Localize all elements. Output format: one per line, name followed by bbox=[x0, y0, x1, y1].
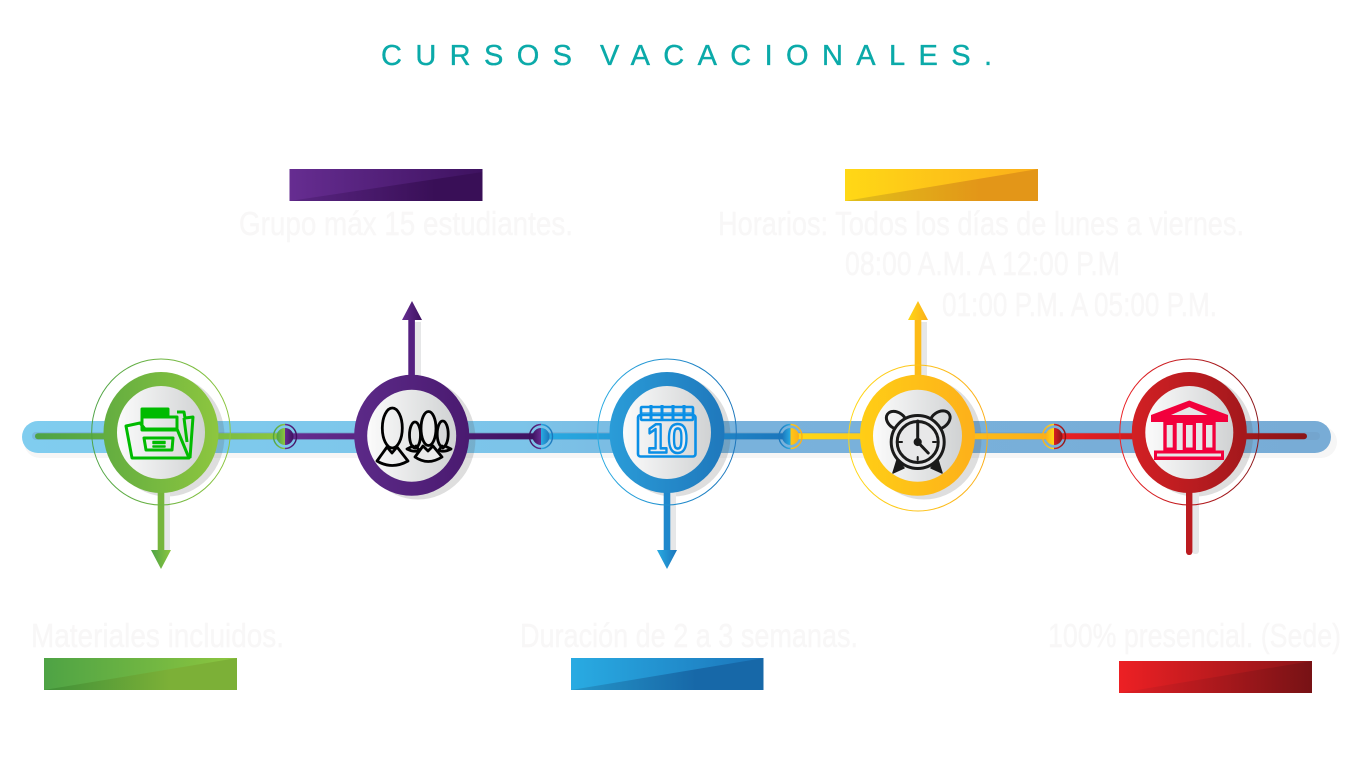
timeline track bbox=[22, 421, 1337, 458]
icon: calendar: 10 bbox=[647, 416, 688, 462]
marker: purple bbox=[354, 375, 469, 496]
banner: purple bbox=[290, 169, 482, 201]
text: schedule: 01:00 P.M. A 05:00 P.M. bbox=[942, 286, 1217, 323]
node: yellow to red bbox=[1042, 424, 1066, 448]
node: green to purple bbox=[274, 424, 296, 448]
icon: alarm clock bbox=[883, 407, 954, 473]
icon: calendar bbox=[638, 405, 696, 462]
icon: folder bbox=[126, 409, 193, 458]
node: blue to yellow bbox=[779, 424, 802, 448]
banner: blue bbox=[571, 658, 764, 690]
text: schedule: 08:00 A.M. A 12:00 P.M bbox=[845, 245, 1120, 282]
marker: yellow bbox=[849, 365, 987, 511]
arrow: blue down bbox=[657, 488, 677, 569]
text: duration: Duración de 2 a 3 semanas. bbox=[520, 617, 858, 654]
title: VACACIONALES. bbox=[600, 40, 992, 72]
text: schedule: Horarios: Todos los días de lunes a viernes. bbox=[718, 205, 1244, 242]
marker: red bbox=[1120, 359, 1259, 505]
timeline line segments bbox=[35, 433, 1307, 439]
marker drop shadows bbox=[110, 376, 1253, 500]
text: materials: Materiales incluidos. bbox=[31, 617, 284, 654]
text: group size: Grupo máx 15 estudiantes. bbox=[239, 205, 573, 242]
arrow: purple up bbox=[402, 301, 422, 379]
icon: people bbox=[377, 408, 451, 466]
icon: institution building bbox=[1151, 400, 1228, 460]
banner: yellow bbox=[845, 169, 1038, 201]
title bbox=[381, 40, 992, 72]
arrow: green down bbox=[151, 488, 171, 569]
banner: green bbox=[44, 658, 237, 690]
arrow: yellow up bbox=[908, 301, 928, 379]
node: purple to blue bbox=[530, 424, 552, 448]
stem: red bbox=[1186, 488, 1199, 555]
marker: blue bbox=[598, 359, 736, 505]
title: CURSOS bbox=[381, 40, 572, 72]
banner: red bbox=[1119, 661, 1312, 693]
marker: green bbox=[92, 359, 230, 505]
text: schedule bbox=[718, 205, 1244, 323]
